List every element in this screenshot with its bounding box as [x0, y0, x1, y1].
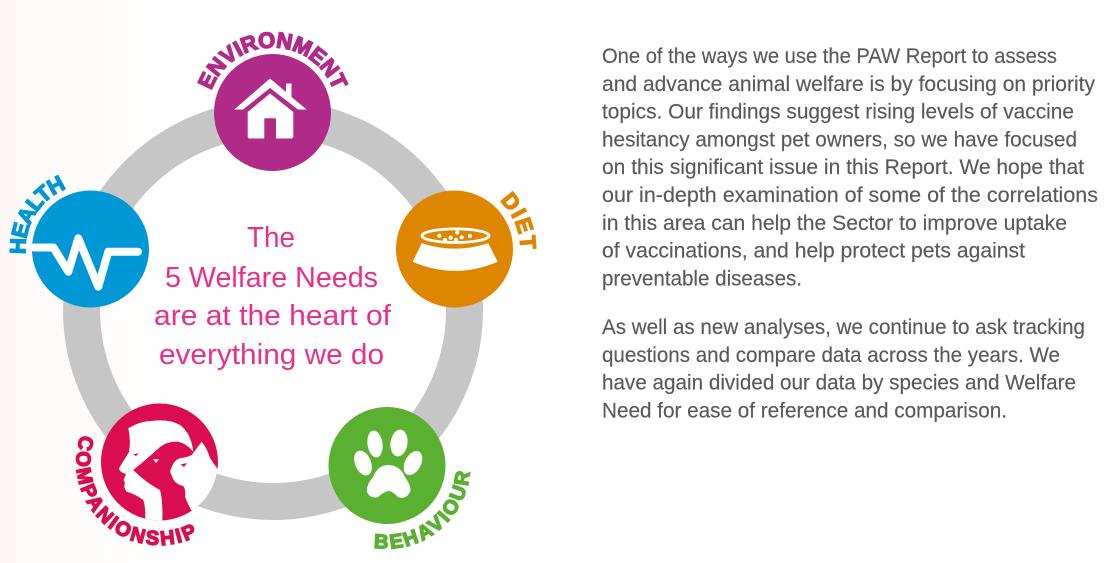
paragraph: priority topics: hesitancy amongst pet owners, so we have focused [602, 128, 1077, 151]
paragraph: priority topics: and advance animal welfare is by focusing on priority [602, 73, 1095, 96]
paragraph: tracking questions: have again divided our data by species and Welfare [602, 372, 1076, 395]
paragraph: priority topics: One of the ways we use the PAW Report to assess [602, 45, 1057, 68]
icon: environment [214, 54, 331, 171]
paragraph: priority topics: in this area can help the Sector to improve uptake [602, 212, 1067, 235]
icon: behaviour [328, 407, 446, 524]
ring connecting the five needs [82, 118, 464, 502]
paragraph: tracking questions: As well as new analyses, we continue to ask tracking [602, 316, 1085, 339]
label: diet: DIET [500, 190, 537, 250]
label: environment: ENVIRONMENT [197, 32, 349, 90]
centre statement: The [247, 222, 295, 254]
paragraph: tracking questions: questions and compare data across the years. We [602, 344, 1060, 367]
centre statement: are at the heart of [154, 300, 391, 332]
centre statement [154, 222, 391, 371]
icon: diet [396, 190, 513, 308]
label: health: HEALTH [9, 174, 66, 254]
paragraph: priority topics: on this significant issue in this Report. We hope that [602, 156, 1084, 179]
label: behaviour: BEHAVIOUR [374, 471, 471, 550]
paragraph: tracking questions [602, 316, 1085, 422]
centre statement: everything we do [159, 339, 384, 371]
paragraph: priority topics: preventable diseases. [602, 267, 802, 290]
centre statement: 5 Welfare Needs [165, 262, 378, 294]
icon: health [32, 190, 149, 308]
paragraph: priority topics: of vaccinations, and help protect pets against [602, 240, 1025, 263]
paragraph: priority topics: topics. Our findings suggest rising levels of vaccine [602, 101, 1074, 124]
paragraph: priority topics [602, 45, 1098, 290]
paragraph: priority topics: our in-depth examination of some of the correlations [602, 184, 1098, 207]
label: companionship: COMPANIONSHIP [76, 436, 194, 546]
paragraph: tracking questions: Need for ease of reference and comparison. [602, 399, 1007, 422]
icon: companionship [101, 404, 218, 520]
